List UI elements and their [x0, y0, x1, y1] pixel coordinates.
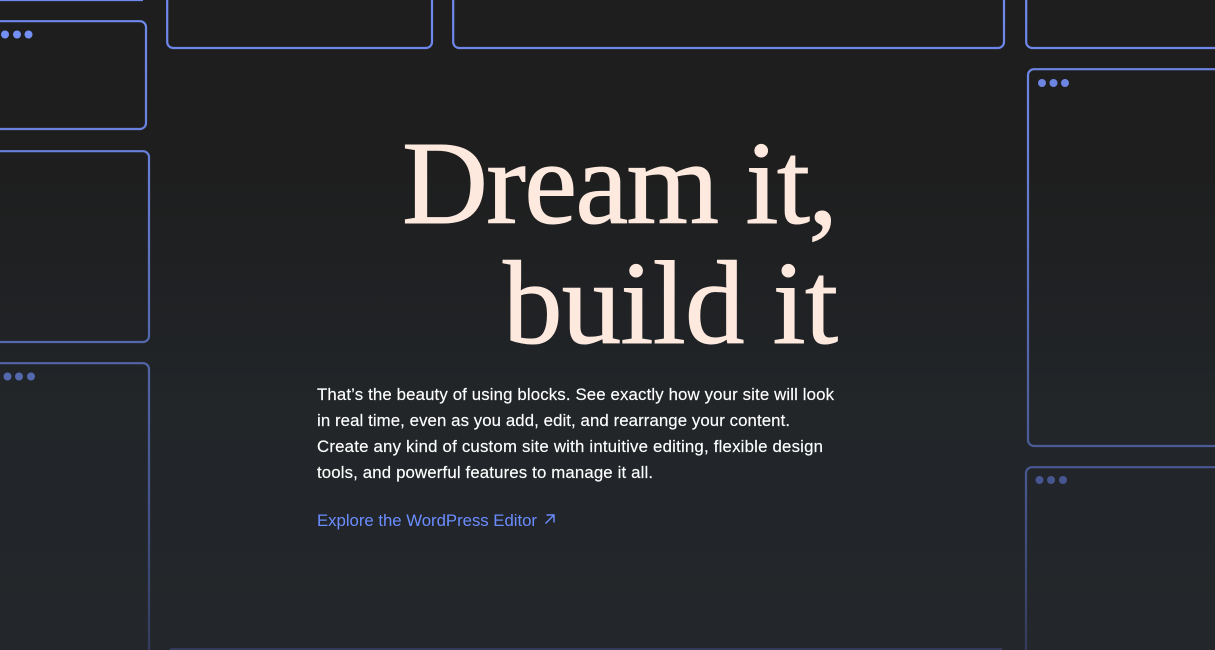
frame: top window two — [453, 0, 1004, 48]
heading — [402, 117, 838, 369]
frame: right upper window — [1028, 69, 1215, 446]
body paragraph: That’s the beauty of using blocks. See exactly how your site will look — [317, 385, 835, 404]
frame: top-left strip — [0, 0, 143, 1]
frame: top window three — [1026, 0, 1215, 48]
frame: right lower window — [1026, 467, 1215, 650]
frame: top window one — [167, 0, 432, 48]
frame: left upper window — [0, 21, 146, 129]
dots: left upper window — [1, 30, 32, 38]
body paragraph: tools, and powerful features to manage it all. — [317, 463, 653, 482]
frame: left middle window — [0, 151, 149, 342]
heading: build it — [503, 237, 838, 369]
body paragraph — [317, 385, 835, 482]
dots: right upper window — [1038, 79, 1069, 87]
icon: external arrow — [546, 515, 554, 524]
frame: bottom window — [170, 648, 1002, 650]
heading: Dream it, — [402, 117, 838, 249]
body paragraph: Create any kind of custom site with intuitive editing, flexible design — [317, 437, 823, 456]
body paragraph: in real time, even as you add, edit, and rearrange your content. — [317, 411, 790, 430]
dots: left lower window — [4, 372, 35, 380]
dots: right lower window — [1036, 476, 1067, 484]
frame: left lower window — [0, 363, 149, 650]
link: Explore the WordPress Editor: Explore the WordPress Editor — [317, 511, 537, 530]
